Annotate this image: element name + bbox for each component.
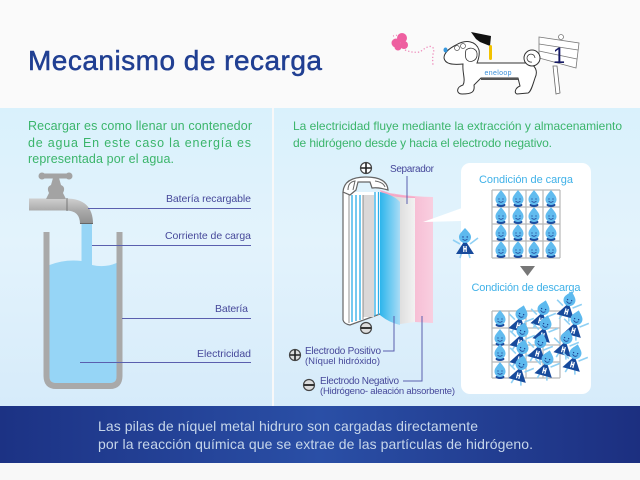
- text block: left intro: [28, 119, 252, 166]
- arrow: to discharge: [520, 266, 535, 276]
- dog body: [444, 42, 536, 94]
- callout labels: Electricidad: [197, 348, 251, 360]
- icon: hydrogen hero: [453, 228, 478, 258]
- separator label: Separador: [390, 164, 435, 175]
- negative electrode label: [304, 316, 455, 397]
- text block: right intro: de hidrógeno desde y hacia el electrodo negativo.: [293, 136, 552, 150]
- positive electrode label: Electrodo Positivo: [305, 346, 381, 357]
- text block: left intro: representada por el agua.: [28, 152, 174, 166]
- illustration: faucet and container: [29, 172, 251, 386]
- chart: discharged lattice: [492, 288, 591, 388]
- eneloop label: eneloop: [484, 70, 512, 77]
- title: Mecanismo de recarga: [28, 45, 322, 76]
- pink negative electrode: [380, 190, 433, 323]
- panel: conditions callout: [423, 163, 591, 394]
- mascot: dog with graduation cap and sign: [392, 32, 579, 94]
- text block: right intro: La electricidad fluye mediante la extracción y almacenamiento: [293, 119, 622, 133]
- banner: conclusion: Las pilas de níquel metal hidruro son cargadas directamente: [98, 418, 478, 434]
- text block: left intro: Recargar es como llenar un contenedor: [28, 119, 252, 133]
- banner: conclusion: [0, 406, 640, 463]
- heading: discharge condition: Condición de descarga: [472, 282, 581, 294]
- header background: [0, 0, 640, 108]
- heading: charge condition: Condición de carga: [479, 174, 574, 186]
- blue positive electrode: [380, 192, 400, 325]
- negative electrode label: Electrodo Negativo: [320, 376, 399, 387]
- callout labels: Batería recargable: [166, 193, 251, 205]
- battery case: [343, 192, 380, 325]
- callout labels: [165, 193, 251, 360]
- icon: water in container: [50, 224, 116, 383]
- icon: faucet: [29, 172, 93, 224]
- callout labels: Batería: [215, 303, 248, 315]
- tail: [524, 50, 540, 66]
- illustration: battery cutaway: [290, 162, 455, 397]
- callout labels: Corriente de carga: [165, 230, 251, 242]
- grey separator: [392, 196, 415, 324]
- text block: left intro: de agua En este caso la energía es: [28, 136, 251, 150]
- icon: pink butterfly: [392, 33, 408, 50]
- battery top cap: [343, 177, 388, 195]
- positive electrode label: [290, 316, 394, 367]
- icon: plus terminal: [360, 162, 372, 174]
- text block: right intro: [293, 119, 622, 150]
- chart: charged lattice: [492, 190, 560, 258]
- banner: conclusion: por la reacción química que se extrae de las partículas de hidrógeno.: [98, 436, 533, 452]
- sign post: [553, 66, 560, 94]
- panel: right electrochemistry: [274, 108, 640, 406]
- icon: minus terminal: [360, 322, 372, 334]
- graduation cap: [471, 32, 491, 46]
- callout lines: [80, 208, 251, 362]
- negative electrode label: (Hidrógeno- aleación absorbente): [320, 386, 455, 397]
- icon: container: [46, 232, 120, 386]
- panel: left water analogy: [0, 108, 272, 406]
- positive electrode label: (Níquel hidróxido): [305, 356, 380, 367]
- mascot: dog with graduation cap and sign: 1: [553, 43, 565, 68]
